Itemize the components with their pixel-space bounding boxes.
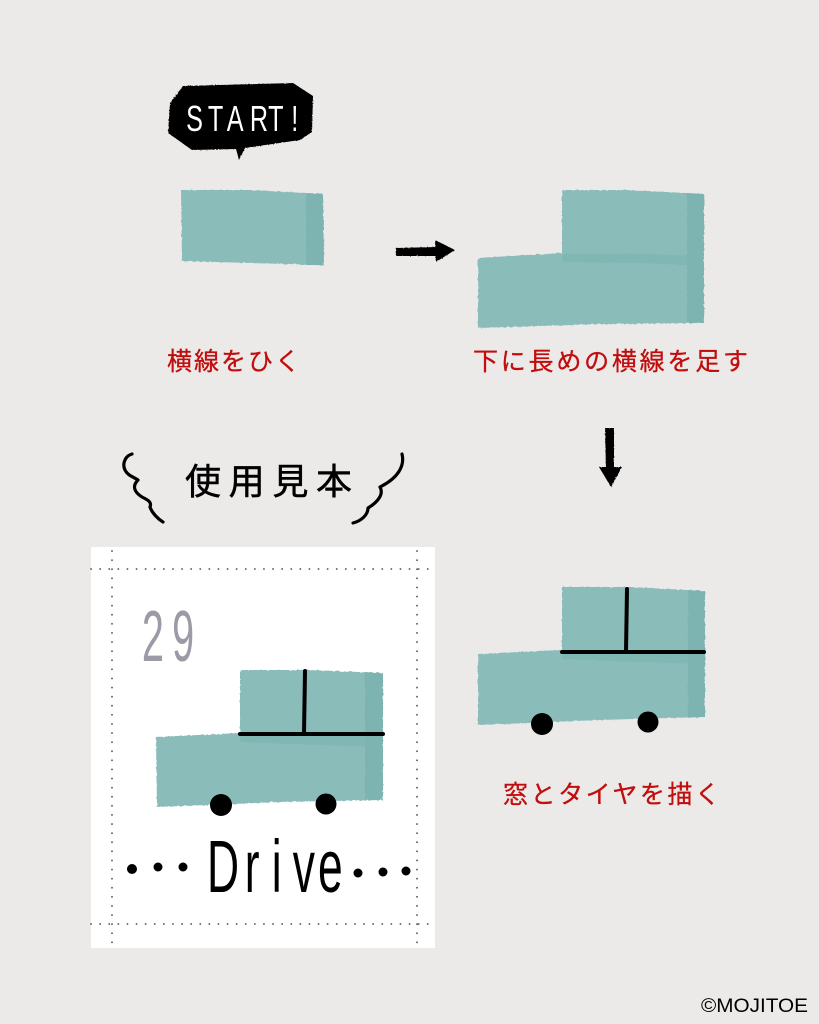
arrow: right	[396, 240, 455, 262]
step 2: two tape rectangles	[478, 190, 704, 328]
heading: sample usage with brackets: 使用見本	[185, 461, 352, 502]
credit: ©MOJITOE	[701, 996, 808, 1017]
car illustration	[156, 670, 383, 816]
speech bubble: START!	[168, 83, 313, 160]
step 3: car with window and tyres	[478, 587, 705, 735]
sample note card	[91, 547, 435, 948]
step 3 caption: 窓とタイヤを描く	[503, 781, 720, 809]
date number: 29	[142, 597, 194, 677]
step 1 caption: 横線をひく	[167, 348, 300, 376]
heading: sample usage with brackets	[124, 454, 403, 523]
step 2 caption: 下に長めの横線を足す	[473, 348, 748, 376]
caption: Drive	[127, 825, 410, 908]
step 1: tape rectangle	[181, 190, 324, 265]
speech bubble: START!: START!	[186, 99, 298, 139]
caption: Drive: Drive	[207, 825, 343, 908]
arrow: down	[599, 428, 622, 487]
